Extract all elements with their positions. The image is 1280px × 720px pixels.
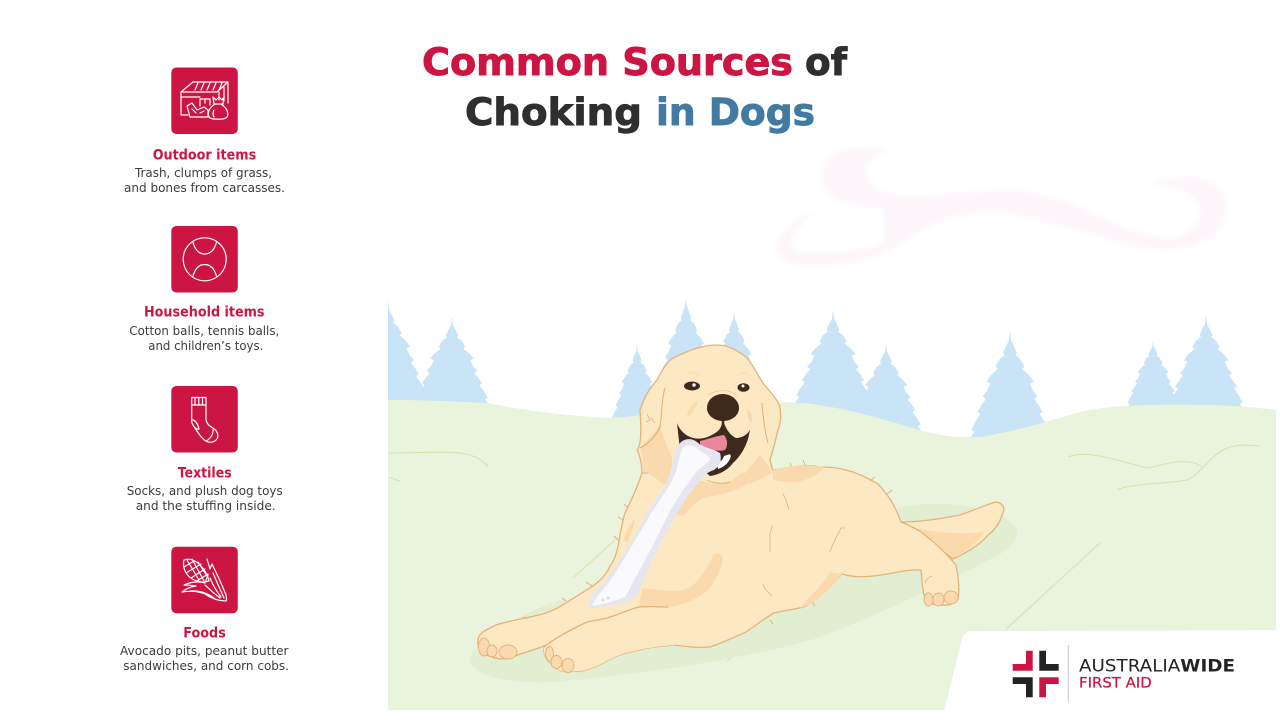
nose — [707, 394, 739, 421]
text: outdoor description — [124, 165, 285, 195]
eyes — [684, 382, 750, 392]
meadow ground — [388, 400, 1277, 712]
text: household description — [129, 323, 279, 353]
text: foods description: sandwiches, and corn cobs. — [123, 658, 289, 673]
text: textiles description — [127, 483, 283, 513]
dog shadow — [469, 504, 1017, 682]
bone — [588, 439, 721, 608]
text: household description: and children’s toys. — [148, 338, 263, 353]
fur tufts — [523, 460, 892, 624]
mouth — [677, 420, 750, 476]
dog body — [478, 466, 959, 672]
text: textiles description: Socks, and plush dog toys — [127, 483, 283, 498]
text: outdoor description: Trash, clumps of grass, — [134, 165, 272, 180]
title: of — [805, 41, 848, 84]
text: household description: Cotton balls, tennis balls, — [129, 323, 279, 338]
title: Choking — [465, 91, 642, 134]
body fur ticks — [763, 494, 932, 596]
logo wordmark: AUSTRALIA WIDE — [1079, 657, 1235, 677]
neck and chest fur shading — [624, 425, 842, 608]
text: textiles description: and the stuffing inside. — [136, 498, 276, 513]
panel: household items — [129, 226, 279, 353]
title — [422, 41, 848, 134]
logo: Australia Wide First Aid — [1013, 645, 1235, 702]
text: outdoor description: and bones from carcasses. — [124, 180, 285, 195]
heading: outdoor items: Outdoor items — [153, 147, 256, 163]
text: foods description — [120, 643, 289, 673]
panel: outdoor items — [124, 68, 285, 195]
logo panel — [944, 630, 1280, 712]
title: in Dogs — [656, 91, 815, 134]
logo cross mark — [1013, 651, 1059, 697]
panel: foods — [120, 547, 289, 673]
heading: textiles: Textiles — [178, 466, 232, 482]
logo wordmark — [1079, 657, 1235, 692]
icon: tennis ball — [171, 226, 238, 292]
heading: foods: Foods — [183, 626, 226, 642]
text: foods description: Avocado pits, peanut butter — [120, 643, 289, 658]
title: Common Sources — [422, 41, 793, 84]
dog toes — [478, 591, 958, 672]
illustration: dog with bone in a meadow — [388, 298, 1276, 710]
heading: household items: Household items — [144, 305, 264, 321]
pink brush swoosh — [777, 148, 1227, 266]
grass lines — [388, 445, 1260, 661]
icon: trash and outdoor shelter — [171, 68, 238, 134]
dog right front leg — [543, 606, 676, 672]
dog head — [624, 345, 842, 608]
pine trees — [388, 298, 1243, 438]
dog tail — [901, 502, 1004, 559]
logo wordmark: FIRST AID — [1079, 676, 1152, 692]
panel: textiles — [127, 386, 283, 513]
icon: corn cob — [171, 547, 238, 613]
icon: sock — [171, 386, 238, 452]
